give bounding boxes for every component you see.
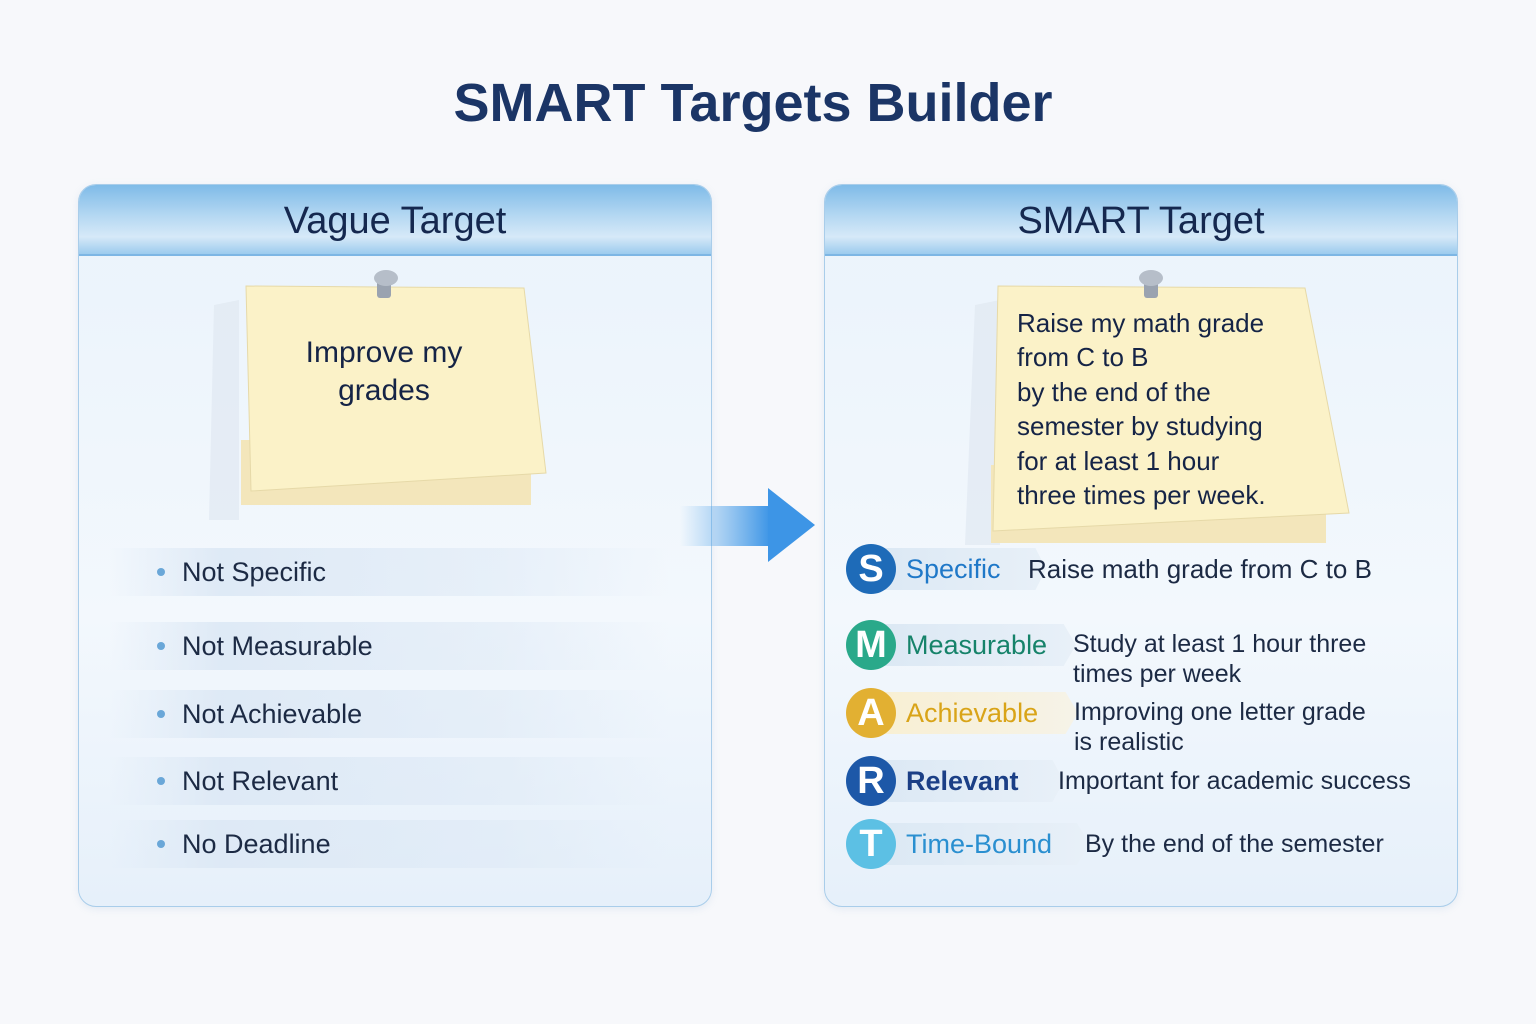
heading: SMART target	[825, 185, 1457, 256]
sticky note: smart goal: by the end of the	[1017, 377, 1211, 407]
smart row: S: Raise math grade from C to B	[1028, 554, 1372, 584]
heading: vague target	[79, 185, 711, 256]
arrow	[685, 488, 815, 562]
text: times per week	[1073, 660, 1241, 688]
smart row: M: Measurable	[906, 630, 1047, 660]
smart row: M	[846, 620, 1366, 688]
smart row: A: Achievable	[906, 698, 1038, 728]
list: vague issues: Not Relevant	[182, 766, 338, 796]
list: vague issues: No Deadline	[182, 829, 331, 859]
heading: SMART target: SMART Target	[1017, 200, 1265, 242]
smart row: T: T	[859, 823, 883, 865]
text: is realistic	[1074, 728, 1184, 756]
smart row: M: Study at least 1 hour three	[1073, 630, 1366, 658]
heading: vague target: Vague Target	[284, 200, 506, 242]
sticky note: smart goal: three times per week.	[1017, 480, 1266, 510]
sticky note: smart goal: semester by studying	[1017, 411, 1263, 441]
smart row: T	[846, 819, 1384, 869]
sticky note: smart goal: from C to B	[1017, 342, 1148, 372]
smart row: S: Specific	[906, 554, 1001, 584]
smart row: R	[846, 756, 1411, 806]
smart row: M: M	[855, 624, 887, 666]
panel: vague target	[78, 184, 712, 907]
smart row: T: By the end of the semester	[1085, 830, 1384, 858]
list: vague issues: Not Specific	[182, 557, 326, 587]
list: vague issues	[154, 548, 550, 868]
sticky note: smart goal	[965, 270, 1350, 545]
panel: SMART target	[824, 184, 1458, 907]
smart row: A	[846, 688, 1366, 756]
sticky note: smart goal: for at least 1 hour	[1017, 446, 1219, 476]
smart row: R: R	[857, 760, 885, 802]
sticky note: smart goal: Raise my math grade	[1017, 308, 1264, 338]
smart row: T: Time-Bound	[906, 829, 1052, 859]
smart row: S: S	[858, 548, 884, 590]
smart row: R: Important for academic success	[1058, 767, 1411, 795]
list: vague issues: Not Measurable	[182, 631, 373, 661]
sticky note: improve my grades	[209, 270, 546, 520]
smart row: A: A	[857, 692, 885, 734]
smart row: R: Relevant	[906, 766, 1019, 796]
sticky note: improve my grades: grades	[338, 374, 430, 407]
list: vague issues: Not Achievable	[182, 699, 362, 729]
smart row: A: Improving one letter grade	[1074, 698, 1366, 726]
sticky note: improve my grades: Improve my	[306, 336, 462, 369]
smart row: S	[846, 544, 1372, 594]
title: SMART Targets Builder	[453, 73, 1053, 133]
